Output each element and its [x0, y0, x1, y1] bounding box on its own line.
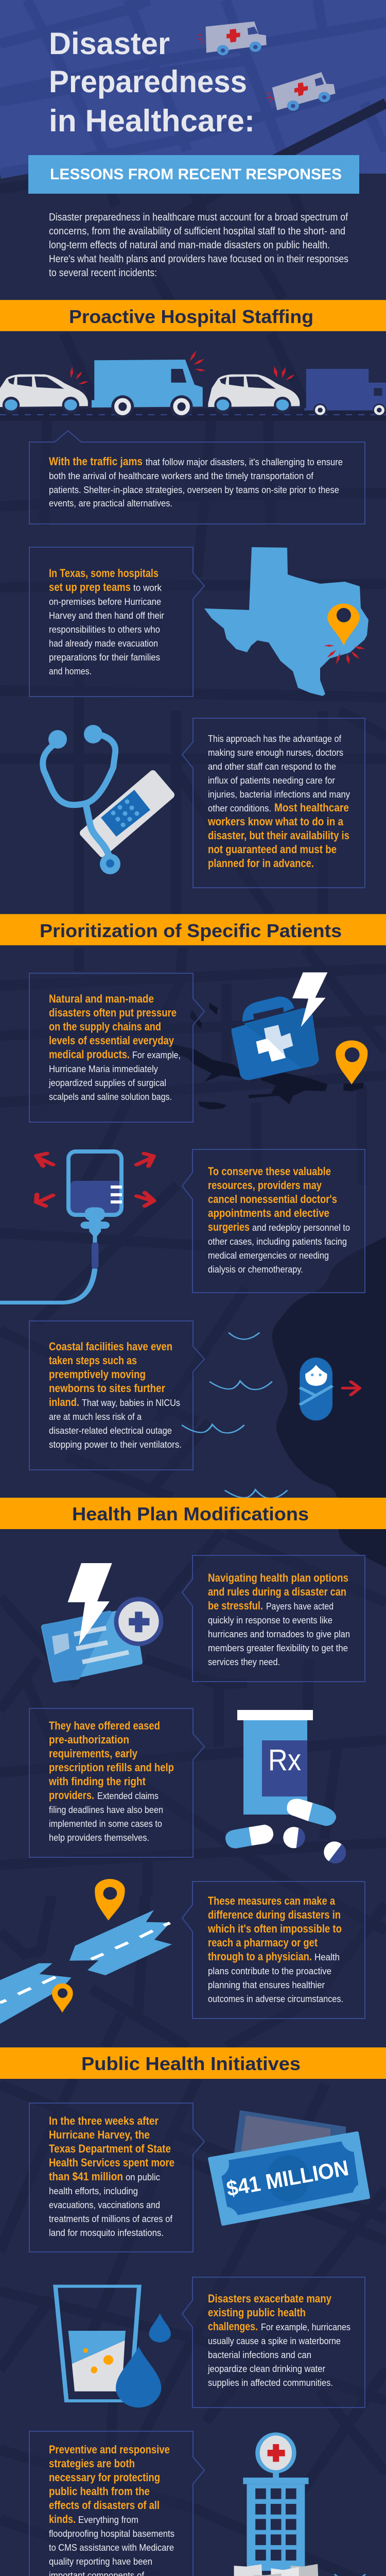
panel: traffic jams callout: both the arrival of healthcare workers and the timely transportation of: [49, 471, 314, 481]
panel: supply chains: Natural and man-made: [49, 992, 154, 1005]
panel: coastal facilities: are at much less risk of a: [49, 1412, 142, 1422]
icon: broken road with location pins: [0, 1879, 172, 2024]
heading: Proactive Hospital Staffing: [0, 300, 386, 331]
icon: Texas map with pin: [204, 547, 369, 696]
panel: coastal facilities: [29, 1321, 204, 1470]
panel: preventive strategies: quality reporting have been: [49, 2556, 152, 2567]
heading: Health Plan Modifications: Health Plan Modifications: [72, 1503, 309, 1524]
panel: eased requirements: requirements, early: [49, 1747, 138, 1760]
panel: public health challenges: jeopardize clean drinking water: [207, 2364, 325, 2374]
panel: preventive strategies: floodproofing hospital basements: [49, 2529, 174, 2539]
panel: Texas spending: than $41 million: [49, 2170, 123, 2183]
panel: Texas prep teams: preparations for their families: [49, 652, 160, 663]
panel: measures make a difference: Health: [314, 1952, 340, 1962]
panel: Texas spending: on public: [126, 2172, 160, 2182]
title: [49, 26, 255, 138]
panel: staffing advantage: not guaranteed and must be: [208, 843, 337, 856]
panel: preventive strategies: Preventive and responsive: [49, 2443, 170, 2456]
panel: public health challenges: bacterial infections and can: [208, 2350, 311, 2360]
title: Disaster: [49, 26, 170, 61]
panel: coastal facilities: taken steps such as: [49, 1354, 137, 1367]
subtitle banner: [28, 155, 359, 194]
panel: staffing advantage: Most healthcare: [274, 801, 349, 814]
panel: preventive strategies: [29, 2431, 204, 2576]
icon: IV bag and red arrows: [0, 1151, 154, 1302]
intro text: long-term effects of natural and man-made disasters on public health.: [49, 240, 330, 251]
panel: measures make a difference: which it's often impossible to: [207, 1922, 342, 1935]
panel: measures make a difference: plans contribute to the proactive: [208, 1966, 331, 1976]
panel: traffic jams callout: [29, 431, 365, 524]
icon: Rx bottle with pills: [225, 1710, 346, 1863]
panel: navigating health plans: be stressful.: [208, 1599, 263, 1612]
panel: conserve resources: resources, providers may: [208, 1179, 322, 1192]
illustration: Caribbean map: [172, 1003, 364, 1109]
panel: public health challenges: challenges.: [208, 2320, 258, 2333]
panel: Texas prep teams: Harvey and then hand off their: [49, 611, 164, 621]
panel: supply chains: [29, 973, 204, 1122]
panel: supply chains: Hurricane Maria immediately: [49, 1064, 158, 1074]
icon: dollar bill: $41 MILLION: [224, 2156, 350, 2201]
panel: navigating health plans: hurricanes and tornadoes to give plan: [208, 1629, 350, 1639]
panel: measures make a difference: outcomes in adverse circumstances.: [208, 1994, 343, 2004]
icon: insurance card with lightning: [44, 1563, 163, 1680]
panel: preventive strategies: effects of disasters of all: [49, 2499, 160, 2512]
panel: coastal facilities: stopping power to their ventilators.: [49, 1439, 182, 1450]
panel: preventive strategies: Everything from: [78, 2515, 138, 2525]
panel: Texas spending: treatments of millions of acres of: [49, 2214, 173, 2224]
panel: supply chains: medical products.: [49, 1048, 130, 1061]
panel: supply chains: jeopardized supplies of surgical: [48, 1078, 166, 1088]
intro text: to several recent incidents:: [49, 267, 157, 279]
panel: staffing advantage: and other staff can respond to the: [208, 761, 336, 772]
panel: navigating health plans: Payers have acted: [266, 1601, 334, 1612]
icon: ambulance lower: [265, 72, 336, 111]
panel: Texas spending: health efforts, including: [49, 2186, 138, 2196]
panel: staffing advantage: influx of patients needing care for: [208, 775, 335, 786]
panel: navigating health plans: and rules during a disaster can: [208, 1585, 346, 1598]
panel: eased requirements: Extended claims: [97, 1791, 159, 1801]
panel: staffing advantage: injuries, bacterial infections and many: [208, 789, 350, 800]
panel: Texas spending: Texas Department of State: [49, 2142, 171, 2155]
panel: measures make a difference: [182, 1882, 365, 2019]
panel: conserve resources: other cases, including patients facing: [208, 1236, 347, 1247]
panel: traffic jams callout: patients. Shelter-in-place strategies, overseen by teams on-site prior to these: [49, 485, 339, 495]
panel: conserve resources: cancel nonessential doctor's: [208, 1193, 337, 1206]
panel: coastal facilities: newborns to sites further: [49, 1382, 165, 1395]
panel: navigating health plans: quickly in response to events like: [208, 1615, 332, 1625]
panel: staffing advantage: disaster, but their availability is: [208, 829, 349, 842]
panel: Texas prep teams: and homes.: [49, 666, 92, 676]
intro text: [49, 212, 348, 279]
icon: stethoscope and bandage: [43, 725, 171, 874]
icon: hospital with sandbags and flood waves: [234, 2434, 365, 2576]
panel: supply chains: disasters often put pressure: [49, 1006, 177, 1019]
panel: staffing advantage: making sure enough nurses, doctors: [208, 748, 343, 758]
panel: conserve resources: surgeries: [208, 1221, 250, 1233]
panel: preventive strategies: to CMS assistance with Medicare: [49, 2543, 174, 2553]
panel: Texas prep teams: responsibilities to others who: [49, 624, 160, 635]
panel: coastal facilities: inland.: [49, 1396, 79, 1409]
panel: measures make a difference: reach a pharmacy or get: [208, 1936, 318, 1949]
panel: traffic jams callout: events, are practical alternatives.: [49, 498, 172, 509]
panel: preventive strategies: public health from the: [49, 2485, 150, 2498]
panel: Texas prep teams: set up prep teams: [49, 581, 131, 594]
panel: supply chains: scalpels and saline solution bags.: [49, 1092, 172, 1102]
panel: supply chains: levels of essential everyday: [49, 1034, 174, 1047]
panel: Texas prep teams: [29, 547, 204, 697]
heading: Public Health Initiatives: Public Health Initiatives: [81, 2053, 301, 2074]
panel: eased requirements: with finding the right: [48, 1775, 146, 1788]
panel: conserve resources: medical emergencies or needing: [208, 1250, 329, 1261]
panel: Texas prep teams: on-premises before Hurricane: [49, 597, 161, 607]
panel: measures make a difference: planning that ensures healthier: [208, 1980, 325, 1990]
panel: Texas spending: [29, 2103, 204, 2252]
panel: preventive strategies: strategies are both: [49, 2457, 135, 2470]
panel: traffic jams callout: that follow major disasters, it's challenging to ensure: [146, 457, 343, 467]
panel: supply chains: on the supply chains and: [49, 1020, 161, 1033]
heading: Public Health Initiatives: [0, 2047, 386, 2079]
icon: medical bag, lightning and pin: [232, 972, 367, 1084]
panel: eased requirements: filing deadlines have also been: [49, 1805, 163, 1815]
panel: conserve resources: To conserve these valuable: [208, 1165, 331, 1178]
panel: Texas spending: Health Services spent more: [49, 2156, 174, 2169]
panel: eased requirements: help providers themselves.: [49, 1833, 149, 1843]
icon: dollar bill: [208, 2110, 370, 2226]
panel: Texas prep teams: had already made evacuation: [49, 638, 158, 649]
intro text: concerns, from the availability of sufficient hospital staff to the short- and: [49, 226, 345, 237]
icon: ambulance top: [196, 22, 267, 55]
heading: Health Plan Modifications: [0, 1498, 386, 1529]
title: in Healthcare:: [49, 104, 255, 138]
panel: staffing advantage: This approach has the advantage of: [208, 734, 342, 744]
panel: eased requirements: providers.: [49, 1789, 94, 1802]
panel: eased requirements: implemented in some cases to: [49, 1819, 162, 1829]
panel: staffing advantage: other conditions.: [208, 803, 271, 814]
panel: navigating health plans: Navigating health plan options: [208, 1571, 348, 1584]
subtitle banner: LESSONS FROM RECENT RESPONSES: [50, 166, 342, 183]
panel: Texas spending: land for mosquito infestations.: [49, 2228, 164, 2238]
panel: Texas spending: evacuations, vaccinations and: [49, 2200, 160, 2210]
panel: Texas prep teams: to work: [133, 583, 162, 593]
background: dark coastline shape: [272, 1236, 386, 1568]
panel: eased requirements: prescription refills and help: [49, 1761, 174, 1774]
icon: contaminated water glass and drops: [56, 2286, 171, 2408]
title: Preparedness: [49, 64, 247, 99]
panel: coastal facilities: preemptively moving: [49, 1368, 146, 1381]
panel: measures make a difference: difference during disasters in: [208, 1908, 341, 1921]
panel: staffing advantage: [182, 718, 365, 888]
panel: public health challenges: Disasters exacerbate many: [208, 2292, 332, 2305]
panel: measures make a difference: These measures can make a: [208, 1894, 336, 1907]
panel: Texas spending: In the three weeks after: [49, 2114, 159, 2127]
panel: conserve resources: dialysis or chemotherapy.: [208, 1264, 303, 1275]
panel: conserve resources: [182, 1149, 365, 1293]
panel: Texas prep teams: In Texas, some hospitals: [49, 567, 159, 580]
panel: Texas spending: Hurricane Harvey, the: [49, 2128, 150, 2141]
panel: supply chains: For example,: [132, 1050, 181, 1060]
panel: navigating health plans: services they need.: [208, 1657, 280, 1667]
panel: public health challenges: [182, 2277, 365, 2408]
panel: coastal facilities: That way, babies in NICUs: [82, 1398, 180, 1408]
panel: eased requirements: They have offered eased: [49, 1719, 160, 1732]
icon: Rx bottle with pills: Rx: [268, 1743, 301, 1777]
intro text: Disaster preparedness in healthcare must account for a broad spectrum of: [49, 212, 348, 223]
panel: preventive strategies: necessary for protecting: [49, 2471, 160, 2484]
panel: measures make a difference: through to a physician.: [208, 1950, 312, 1963]
heading: Prioritization of Specific Patients: [0, 914, 386, 945]
panel: eased requirements: [29, 1708, 204, 1857]
panel: staffing advantage: planned for in advance.: [208, 857, 314, 870]
panel: eased requirements: pre-authorization: [49, 1733, 129, 1746]
panel: public health challenges: For example, hurricanes: [261, 2322, 350, 2332]
panel: staffing advantage: workers know what to do in a: [207, 815, 344, 828]
panel: coastal facilities: Coastal facilities have even: [49, 1340, 172, 1353]
panel: preventive strategies: kinds.: [49, 2513, 76, 2526]
panel: navigating health plans: members greater flexibility to get the: [208, 1643, 348, 1653]
panel: public health challenges: usually cause a spike in waterborne: [208, 2336, 341, 2346]
icon: newborn moved inland with flood waves: [182, 1333, 360, 1498]
panel: coastal facilities: disaster-related electrical outage: [49, 1426, 172, 1436]
panel: conserve resources: and redeploy personnel to: [252, 1223, 350, 1233]
intro text: Here's what health plans and providers have focused on in their responses: [49, 253, 348, 265]
panel: public health challenges: existing public health: [208, 2306, 306, 2319]
panel: conserve resources: appointments and elective: [208, 1207, 329, 1219]
illustration: traffic jam: [0, 350, 386, 421]
panel: traffic jams callout: With the traffic jams: [49, 455, 143, 468]
panel: navigating health plans: [182, 1555, 365, 1682]
heading: Proactive Hospital Staffing: Proactive Hospital Staffing: [69, 306, 313, 327]
heading: Prioritization of Specific Patients: Prioritization of Specific Patients: [40, 920, 342, 941]
panel: public health challenges: supplies in affected communities.: [208, 2378, 333, 2388]
